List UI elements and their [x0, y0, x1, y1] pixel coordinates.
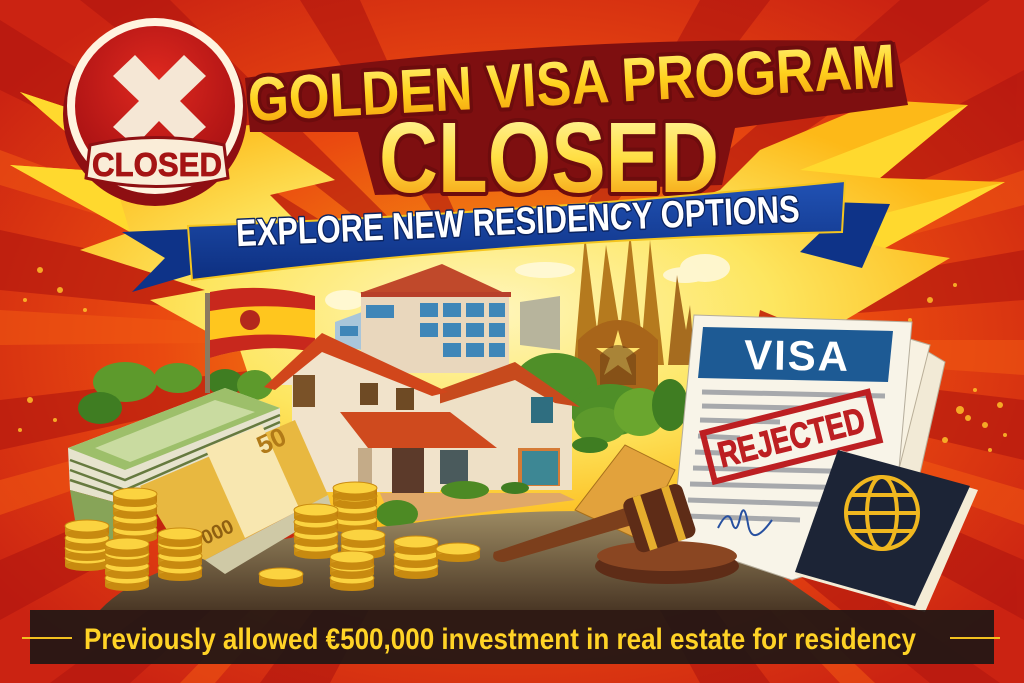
footer caption bar: Previously allowed €500,000 investment in real estate for residency: [84, 623, 916, 656]
gold coin stacks: [65, 482, 480, 591]
visa header band: [698, 327, 893, 382]
ribbon banner: [122, 181, 890, 292]
cash stacks: 50: [252, 421, 291, 460]
ribbon banner: EXPLORE NEW RESIDENCY OPTIONS: [235, 189, 801, 255]
office building: [335, 264, 511, 373]
title: [245, 32, 908, 214]
closed seal: CLOSED: [92, 146, 222, 183]
cash stacks: 000: [198, 515, 237, 550]
trees behind town: [78, 353, 688, 487]
yellow explosion burst: [10, 92, 1005, 530]
cash stacks: [68, 388, 332, 574]
visa header band: VISA: [744, 331, 850, 380]
title: CLOSED: [379, 102, 719, 214]
sparks: [18, 267, 1007, 452]
ground: [100, 511, 830, 610]
banknote by gavel: [575, 445, 675, 540]
passport globe emblem: [846, 477, 918, 549]
clouds in sky: [325, 254, 730, 310]
footer caption bar: [22, 610, 1000, 664]
document text lines: [686, 392, 885, 520]
flag of Spain: [205, 288, 315, 393]
cathedral skyline: [520, 232, 695, 395]
closed seal: [63, 18, 247, 206]
visa document: rejected: [672, 315, 945, 580]
title: GOLDEN VISA PROGRAM: [246, 32, 897, 135]
gavel: [493, 482, 739, 584]
rejected stamp: REJECTED: [714, 399, 869, 475]
passport: [795, 450, 978, 612]
houses: [264, 333, 580, 528]
